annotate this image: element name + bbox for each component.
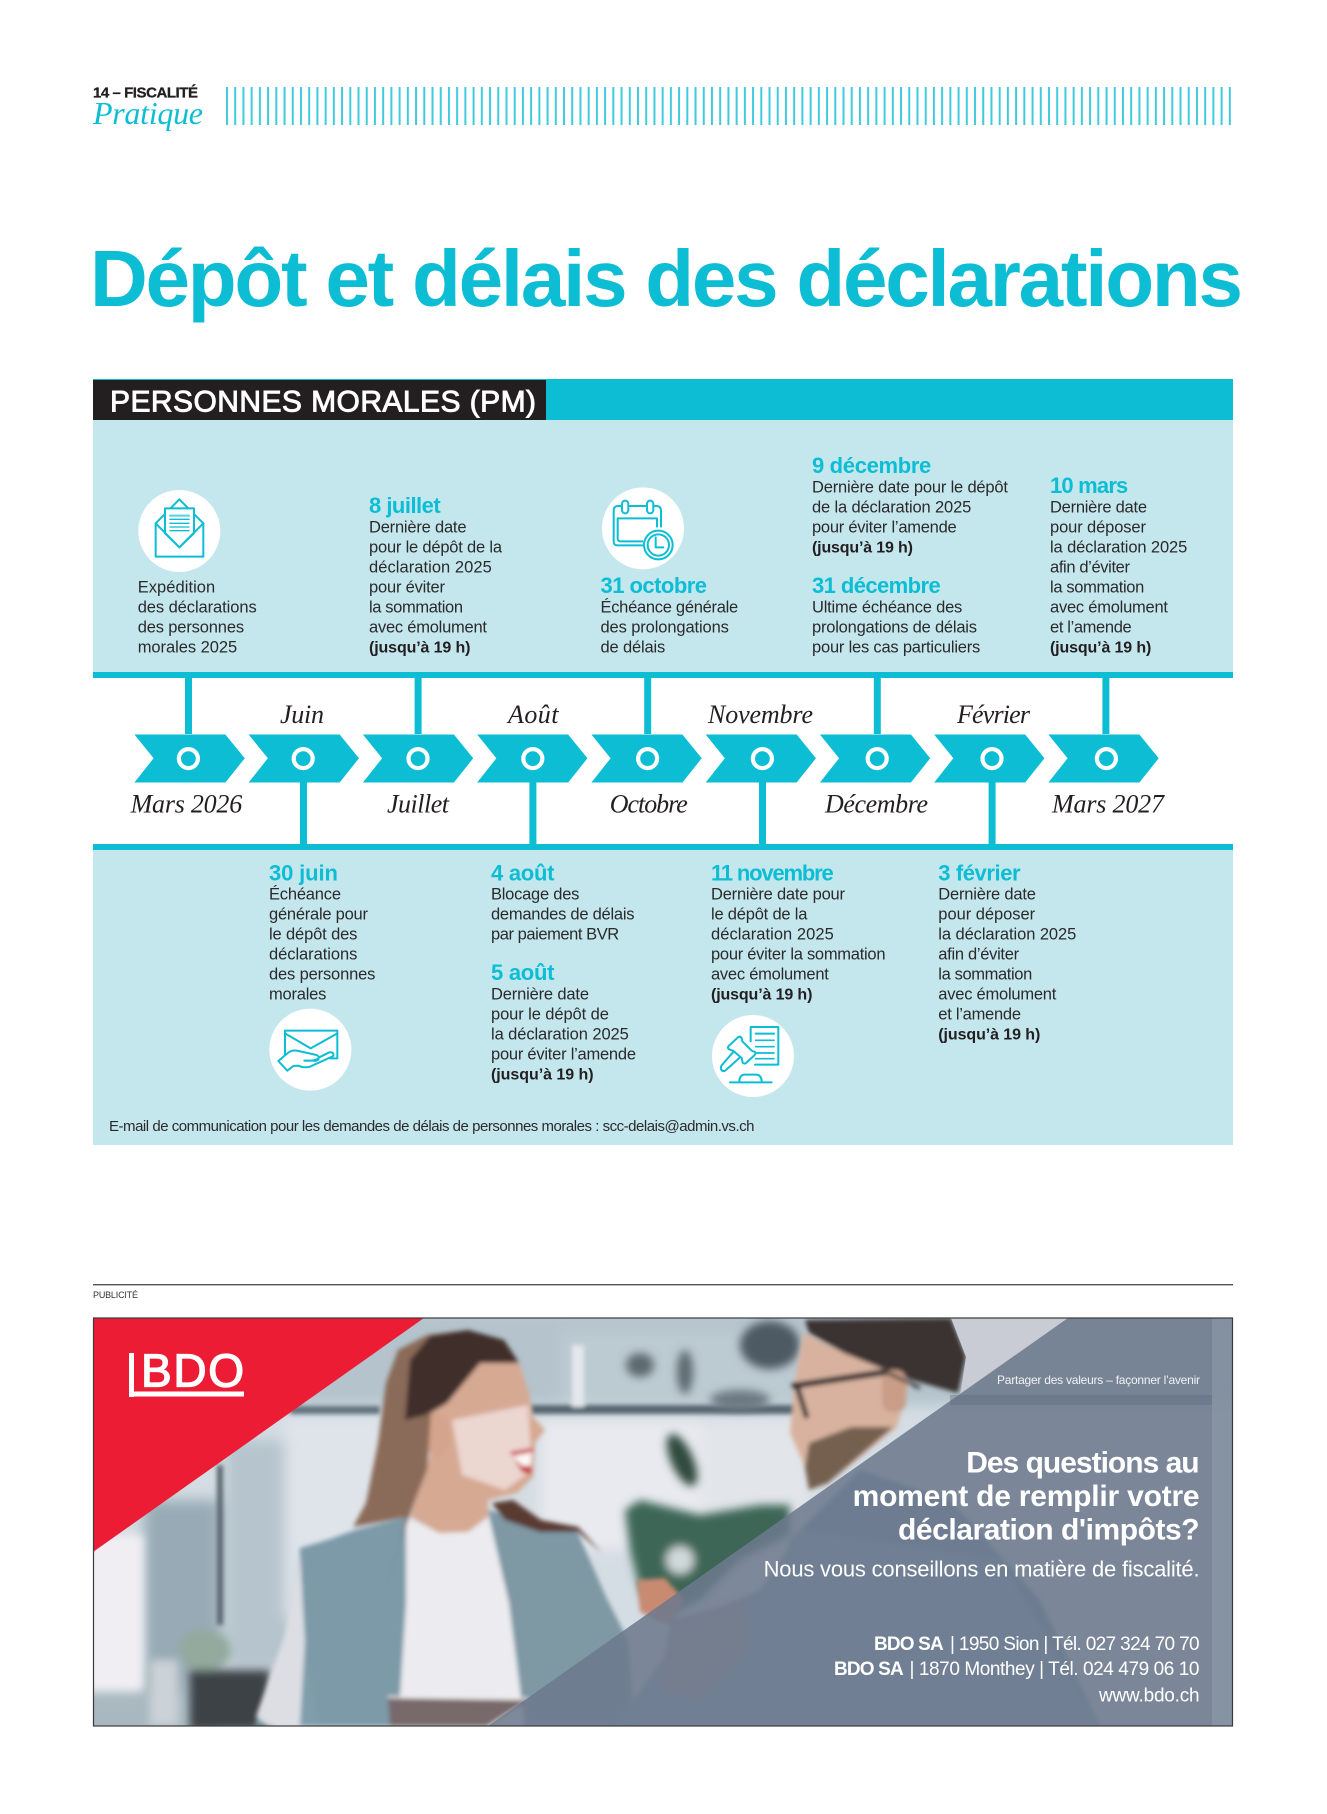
icon: gavel and document <box>712 1015 794 1097</box>
text: 4 août: 4 août <box>491 860 555 886</box>
text: 8 juillet: pour éviter <box>369 579 446 597</box>
month labels: Mars 2026 <box>130 790 242 819</box>
text: 31 décembre <box>812 573 980 657</box>
month labels: Octobre <box>610 790 688 819</box>
text: 8 juillet: (jusqu’à 19 h) <box>369 640 470 657</box>
month labels: Juillet <box>387 790 450 819</box>
text: 31 octobre: 31 octobre <box>600 573 707 598</box>
text: 8 juillet: Dernière date <box>369 519 466 537</box>
decorative barcode stripe <box>226 87 1231 125</box>
text: 3 février: afin d’éviter <box>938 945 1020 963</box>
text: 10 mars: la déclaration 2025 <box>1050 539 1187 557</box>
timeline <box>93 672 1233 850</box>
text: 31 décembre: Ultime échéance des <box>812 599 962 617</box>
text: 9 décembre <box>812 453 1008 557</box>
photo: man <box>615 1318 1100 1726</box>
ad contacts: BDO SA <box>874 1634 944 1655</box>
month labels: Juin <box>280 700 324 729</box>
text: 5 août: la déclaration 2025 <box>491 1025 629 1043</box>
text: 10 mars: la sommation <box>1050 579 1144 597</box>
section name: Pratique: Pratique <box>92 95 203 131</box>
text: 5 août: 5 août <box>491 960 555 985</box>
month labels: Février <box>956 700 1031 729</box>
text: 30 juin: générale pour <box>269 905 368 923</box>
text: 10 mars: avec émolument <box>1050 599 1168 617</box>
text: 10 mars: (jusqu’à 19 h) <box>1050 640 1151 657</box>
photo: blurred office background <box>80 1310 1250 1740</box>
text: 3 février: Dernière date <box>938 885 1036 903</box>
panel: lower deadlines <box>93 850 1233 1145</box>
text: 30 juin: déclarations <box>269 945 357 963</box>
logo: BDO: BDO <box>141 1344 244 1396</box>
photo: woman <box>255 1330 635 1726</box>
text: 11 novembre: 11 novembre <box>711 860 834 886</box>
text: 11 novembre: Dernière date pour <box>711 885 846 903</box>
text: 4 août: demandes de délais <box>491 905 634 923</box>
panel heading band <box>93 379 1233 420</box>
ad subheading: Nous vous conseillons en matière de fiscalité. <box>764 1557 1200 1582</box>
light wedge above the man's head <box>951 1318 1068 1396</box>
frame <box>94 1318 1232 1726</box>
ad contacts <box>834 1634 1200 1707</box>
text: 31 octobre: de délais <box>600 639 665 657</box>
text: 11 novembre <box>711 860 886 1003</box>
ad contacts: www.bdo.ch <box>1098 1686 1200 1707</box>
text: 9 décembre: pour éviter l’amende <box>812 519 957 537</box>
icon: open envelope <box>138 490 220 572</box>
text: 11 novembre: (jusqu’à 19 h) <box>711 986 812 1003</box>
text: 8 juillet: 8 juillet <box>369 493 441 518</box>
text: 31 octobre <box>600 573 738 657</box>
text: 3 février: la sommation <box>938 965 1032 983</box>
text: 5 août: Dernière date <box>491 985 589 1003</box>
text: 8 juillet: avec émolument <box>369 619 487 637</box>
text: 3 février: et l’amende <box>938 1005 1021 1023</box>
grey diagonal overlay <box>488 1318 1233 1726</box>
text: 8 juillet: la sommation <box>369 599 463 617</box>
text: 30 juin: des personnes <box>269 965 375 983</box>
text: 3 février: pour déposer <box>938 905 1036 923</box>
ad contacts: | 1870 Monthey | Tél. 024 479 06 10 <box>910 1659 1200 1680</box>
text: expédition <box>138 579 257 657</box>
text: 9 décembre: Dernière date pour le dépôt <box>812 479 1008 497</box>
text: 10 mars <box>1050 473 1187 657</box>
month labels: Décembre <box>824 790 928 819</box>
text: 10 mars: pour déposer <box>1050 519 1146 537</box>
text: 31 octobre: Échéance générale <box>600 598 738 617</box>
text: 9 décembre: (jusqu’à 19 h) <box>812 540 913 557</box>
text: 8 juillet: pour le dépôt de la <box>369 539 503 557</box>
section label: 14 – FISCALITÉ <box>93 85 198 102</box>
text: 4 août <box>491 860 634 943</box>
text: 10 mars: Dernière date <box>1050 499 1147 517</box>
month labels: Août <box>506 700 559 729</box>
text: 31 octobre: des prolongations <box>600 619 729 637</box>
ad headline <box>853 1447 1200 1546</box>
text: 9 décembre: 9 décembre <box>812 453 931 478</box>
text: 3 février: avec émolument <box>938 985 1057 1003</box>
red triangle <box>93 1318 424 1552</box>
text: 3 février: (jusqu’à 19 h) <box>938 1026 1040 1043</box>
text: expédition: des personnes <box>138 619 244 637</box>
text: 4 août: par paiement BVR <box>491 925 619 943</box>
text: expédition: morales 2025 <box>138 639 237 657</box>
text: 31 décembre: pour les cas particuliers <box>812 639 980 657</box>
text: 5 août: pour le dépôt de <box>491 1005 609 1023</box>
text: 3 février: 3 février <box>938 860 1021 886</box>
text: 11 novembre: déclaration 2025 <box>711 925 834 943</box>
panel heading band: PERSONNES MORALES (PM) <box>110 386 536 419</box>
text: 8 juillet <box>369 493 503 657</box>
panel: upper deadlines <box>93 420 1233 672</box>
text: 31 décembre: 31 décembre <box>812 573 941 598</box>
page header <box>92 85 1231 131</box>
advertisement: BDO <box>80 1310 1250 1740</box>
text: 30 juin <box>269 860 375 1003</box>
text: 31 décembre: prolongations de délais <box>812 619 977 637</box>
text: 5 août: pour éviter l’amende <box>491 1045 636 1063</box>
month labels: Novembre <box>707 700 813 729</box>
text: 10 mars: et l’amende <box>1050 619 1132 637</box>
text: 8 juillet: déclaration 2025 <box>369 559 492 577</box>
timeline markers <box>179 749 1116 768</box>
month labels: Mars 2027 <box>1051 790 1165 819</box>
advertising rule and label: PUBLICITÉ <box>93 1290 138 1300</box>
text: expédition: Expédition <box>138 579 215 597</box>
ad headline: moment de remplir votre <box>853 1480 1200 1513</box>
text: 30 juin: le dépôt des <box>269 925 357 943</box>
text: 11 novembre: pour éviter la sommation <box>711 945 886 963</box>
title: Dépôt et délais des déclarations <box>90 234 1243 323</box>
text: 3 février <box>938 860 1076 1043</box>
text: 10 mars: 10 mars <box>1050 473 1128 498</box>
text: 11 novembre: le dépôt de la <box>711 905 808 923</box>
text: 4 août: Blocage des <box>491 885 579 903</box>
ad headline: Des questions au <box>966 1447 1200 1480</box>
text: 5 août <box>491 960 636 1083</box>
icon: calendar and clock <box>602 487 684 569</box>
text: 9 décembre: de la déclaration 2025 <box>812 499 971 517</box>
ad tagline: Partager des valeurs – façonner l’avenir <box>997 1373 1200 1387</box>
text: contact e-mail: E-mail de communication pour les demandes de délais de personnes morales : scc-delais@admin.vs.ch <box>109 1118 754 1135</box>
text: 30 juin: 30 juin <box>269 860 338 886</box>
ad contacts: | 1950 Sion | Tél. 027 324 70 70 <box>950 1634 1200 1655</box>
text: 30 juin: Échéance <box>269 884 341 903</box>
text: 5 août: (jusqu’à 19 h) <box>491 1066 594 1083</box>
chevrons <box>134 734 1159 782</box>
ad contacts: BDO SA <box>834 1659 904 1680</box>
text: 10 mars: afin d’éviter <box>1050 559 1130 577</box>
icon: hand holding envelope <box>269 1009 351 1091</box>
month labels <box>130 700 1165 819</box>
ad headline: déclaration d'impôts? <box>898 1513 1200 1546</box>
text: 30 juin: morales <box>269 985 326 1003</box>
text: expédition: des déclarations <box>138 599 257 617</box>
text: 11 novembre: avec émolument <box>711 965 829 983</box>
text: 3 février: la déclaration 2025 <box>938 925 1076 943</box>
